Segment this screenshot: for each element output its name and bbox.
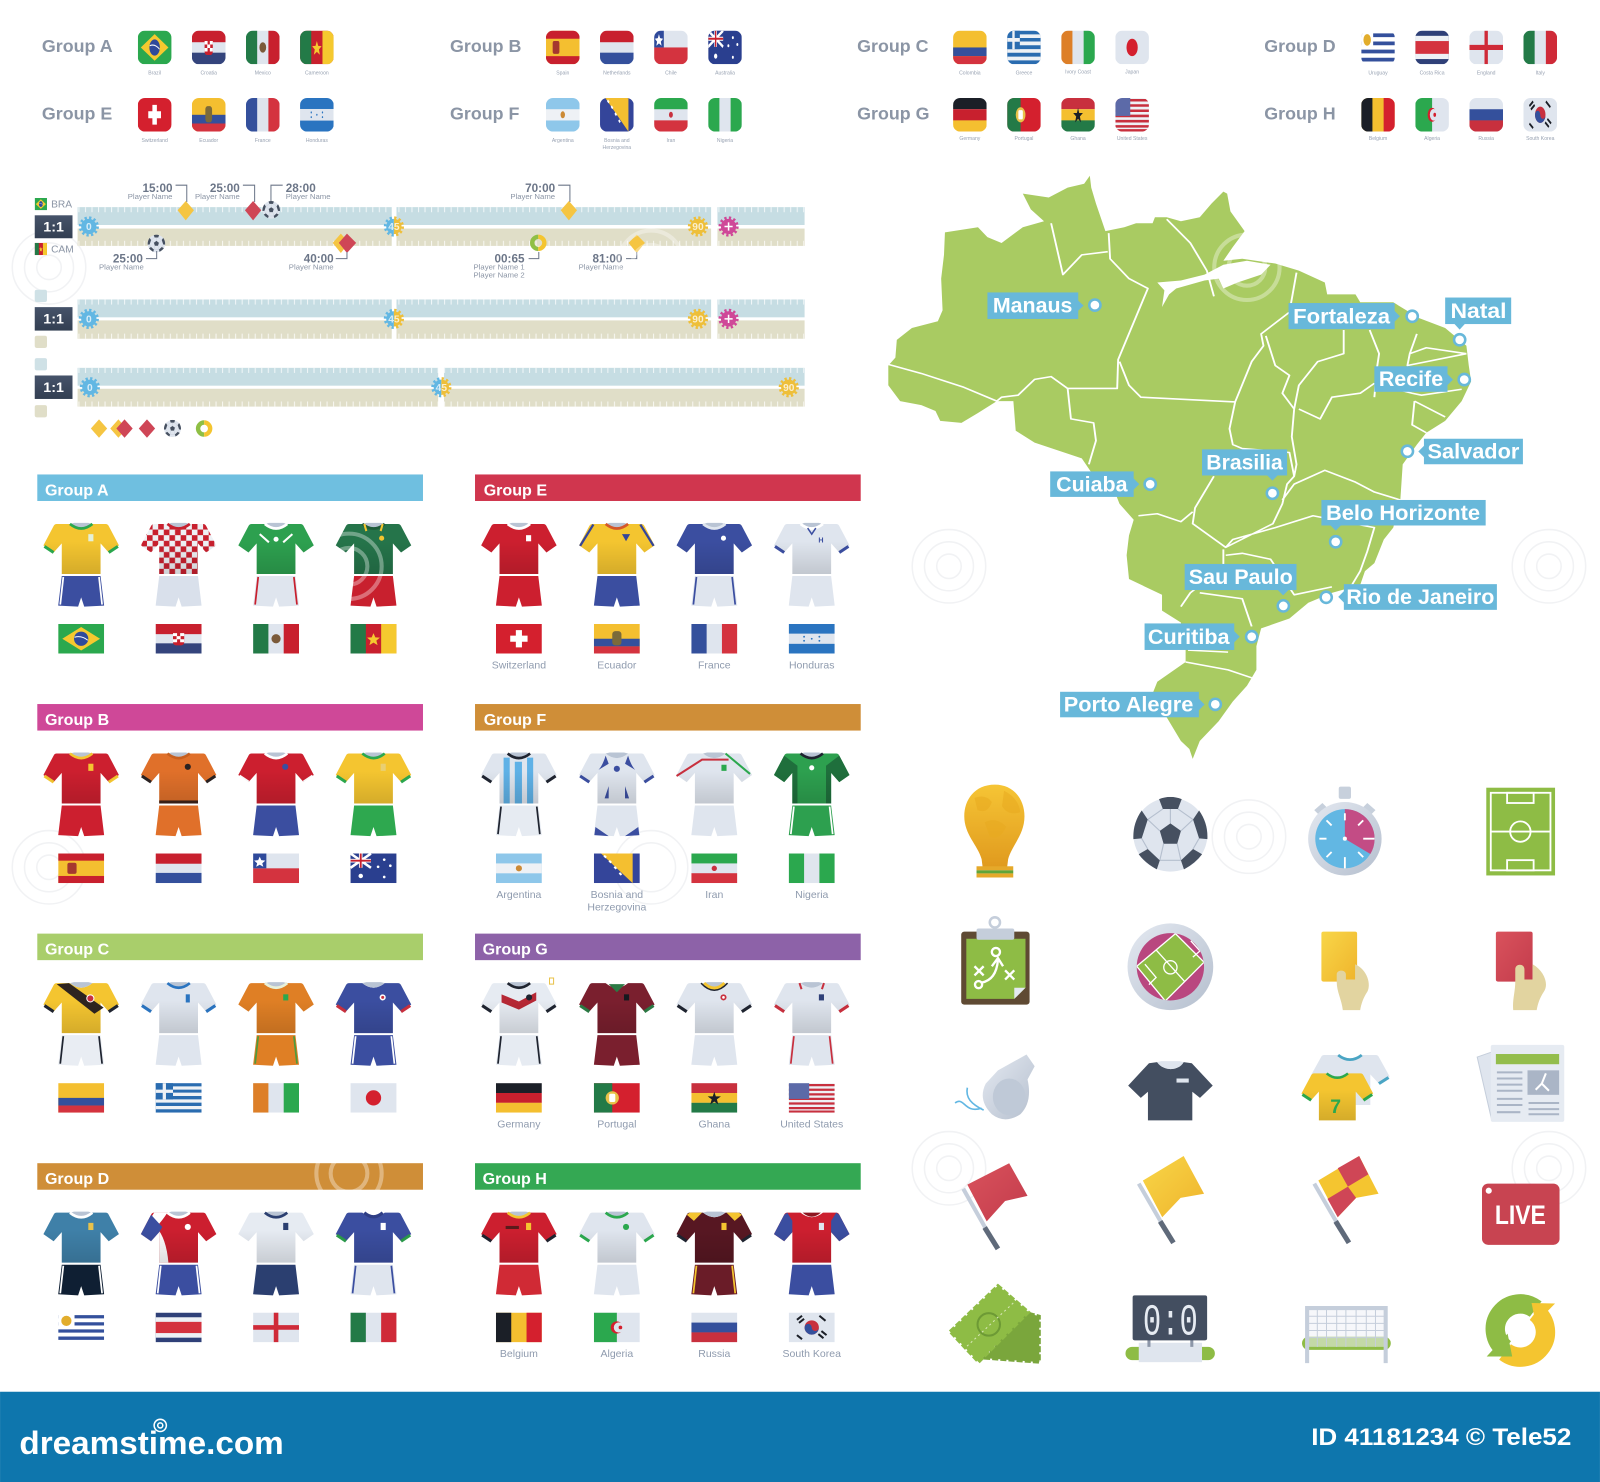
panel: group flag overview bbox=[42, 31, 1557, 151]
city: Fortaleza bbox=[1289, 303, 1418, 329]
city: Porto Alegre: Porto Alegre bbox=[1064, 693, 1193, 717]
heading: group D: Group D bbox=[45, 1170, 109, 1188]
group C flags: Colombia bbox=[959, 70, 981, 76]
icon: refresh arrows bbox=[1487, 1303, 1555, 1357]
city: Manaus bbox=[987, 292, 1100, 319]
event: 15:00 yellow card: 15:00 bbox=[143, 182, 173, 195]
kit: Croatia bbox=[141, 523, 216, 654]
panel: icon set bbox=[950, 785, 1564, 1363]
timeline row 1: CAM bbox=[51, 245, 74, 256]
timeline row 2 bbox=[35, 290, 805, 348]
event: 70:00 yellow card bbox=[510, 182, 577, 220]
group F flags bbox=[450, 98, 742, 151]
group C flags: Ivory Coast bbox=[1065, 69, 1092, 75]
icon: goal bbox=[1302, 1308, 1391, 1363]
kit: Ivory Coast bbox=[238, 982, 314, 1113]
timeline row 1: 90 bbox=[692, 222, 704, 233]
kit: Spain bbox=[43, 753, 119, 883]
group F flags: Nigeria bbox=[717, 138, 733, 144]
kit: Switzerland: Switzerland bbox=[492, 659, 546, 671]
kit: Germany bbox=[481, 978, 557, 1130]
kit: Uruguay bbox=[43, 1212, 119, 1342]
city: Belo Horizonte: Belo Horizonte bbox=[1326, 501, 1480, 525]
kit: Ghana: Ghana bbox=[699, 1118, 730, 1130]
group D flags: Uruguay bbox=[1368, 70, 1388, 76]
city: Recife: Recife bbox=[1379, 367, 1443, 391]
kit: Honduras: Honduras bbox=[789, 659, 834, 671]
icon: tactics clipboard bbox=[961, 917, 1030, 1005]
city: Sau Paulo: Sau Paulo bbox=[1189, 565, 1293, 589]
group A flags: Brazil bbox=[148, 70, 161, 76]
icon: red flag bbox=[963, 1163, 1028, 1249]
icon: football bbox=[1133, 797, 1207, 872]
group G flags: Germany bbox=[959, 136, 981, 142]
event: 40:00 second yellow: 40:00 bbox=[304, 253, 334, 266]
footer image id: ID 41181234 © Tele52 bbox=[1311, 1424, 1571, 1451]
group C flags: Greece bbox=[1016, 70, 1032, 76]
event: 81:00 yellow card: Player Name bbox=[579, 262, 623, 271]
kit: Russia: Russia bbox=[698, 1348, 730, 1360]
group E flags: Ecuador bbox=[199, 138, 218, 144]
group C flags: Group C bbox=[857, 36, 929, 56]
kit: Belgium bbox=[481, 1212, 557, 1360]
city: Natal bbox=[1445, 298, 1511, 345]
city: Salvador: Salvador bbox=[1428, 440, 1519, 464]
group D flags: Italy bbox=[1536, 70, 1545, 76]
timeline row 1: 1:1 bbox=[43, 220, 64, 236]
icon: trophy bbox=[964, 785, 1024, 877]
icon: yellow flag bbox=[1139, 1156, 1204, 1243]
kit: France: France bbox=[698, 659, 731, 671]
panel: group E kits bbox=[475, 474, 861, 671]
group B flags bbox=[450, 31, 742, 76]
group G flags: Group G bbox=[857, 103, 930, 123]
heading: group H bbox=[475, 1163, 861, 1190]
city: Sau Paulo bbox=[1185, 564, 1296, 611]
city: Brasilia bbox=[1202, 449, 1287, 499]
timeline row 3: 90 bbox=[783, 383, 795, 394]
kit: France bbox=[677, 523, 752, 671]
heading: group A: Group A bbox=[45, 481, 109, 499]
group H flags: Belgium bbox=[1369, 136, 1387, 142]
kit: Nigeria bbox=[774, 753, 849, 901]
group F flags: Argentina bbox=[552, 138, 574, 144]
footer banner bbox=[0, 1392, 1600, 1482]
heading: group E: Group E bbox=[484, 481, 547, 499]
event: 40:00 second yellow bbox=[289, 234, 356, 271]
group C flags: Japan bbox=[1125, 69, 1139, 75]
heading: group F bbox=[475, 704, 861, 731]
kit: Colombia bbox=[43, 982, 119, 1113]
group E flags: Group E bbox=[42, 103, 112, 123]
event: 25:00 goal: Player Name bbox=[99, 262, 144, 271]
group A flags bbox=[42, 31, 334, 76]
timeline row 3: 0 bbox=[87, 383, 93, 394]
event: 25:00 goal bbox=[99, 235, 165, 271]
event: 25:00 red card: 25:00 bbox=[210, 182, 240, 195]
kit: Greece bbox=[141, 982, 216, 1113]
group H flags: South Korea bbox=[1526, 136, 1555, 142]
kit: Japan bbox=[336, 982, 411, 1113]
group E flags: France bbox=[255, 138, 271, 144]
city: Fortaleza: Fortaleza bbox=[1293, 304, 1391, 328]
heading: group F: Group F bbox=[484, 711, 546, 729]
timeline row 2: 0 bbox=[86, 314, 92, 325]
group G flags: United States bbox=[1117, 136, 1148, 142]
timeline row 2: 45 bbox=[388, 314, 400, 325]
event: 28:00 goal: 28:00 bbox=[286, 182, 316, 195]
kit: Italy bbox=[336, 1213, 411, 1342]
kit: South Korea: South Korea bbox=[783, 1348, 841, 1360]
heading: group B bbox=[37, 704, 423, 731]
icon: newspaper bbox=[1477, 1045, 1564, 1122]
icon: corner flag bbox=[1314, 1156, 1379, 1243]
city: Brasilia: Brasilia bbox=[1206, 450, 1284, 474]
group D flags bbox=[1264, 31, 1557, 76]
kit: Cameroon bbox=[336, 523, 411, 654]
group D flags: England bbox=[1477, 70, 1496, 76]
group F flags: Herzegovina bbox=[603, 145, 631, 151]
kit: Portugal bbox=[579, 983, 655, 1130]
kit: Germany: Germany bbox=[497, 1118, 541, 1130]
event: 28:00 goal bbox=[262, 182, 331, 219]
icon: red card in hand bbox=[1496, 932, 1546, 1010]
map of Brazil with host cities bbox=[888, 176, 1523, 759]
event: 81:00 yellow card bbox=[579, 235, 645, 271]
kit: Australia bbox=[336, 753, 411, 883]
group E flags bbox=[42, 98, 334, 144]
timeline row 3 bbox=[35, 358, 805, 417]
group D flags: Group D bbox=[1264, 36, 1336, 56]
timeline row 1: 0 bbox=[86, 222, 92, 233]
kit: Honduras bbox=[774, 523, 849, 671]
kit: Honduras: H bbox=[818, 536, 823, 544]
group H flags bbox=[1264, 98, 1557, 142]
icon: whistle bbox=[955, 1055, 1035, 1119]
timeline row 3: 45 bbox=[436, 383, 447, 394]
group C flags bbox=[857, 31, 1149, 76]
timeline row 2: 90 bbox=[692, 314, 704, 325]
group F flags: Group F bbox=[450, 103, 520, 123]
city: Curitiba: Curitiba bbox=[1148, 625, 1231, 649]
kit: United States bbox=[774, 982, 849, 1130]
group F flags: Bosnia and bbox=[604, 138, 630, 144]
group A flags: Cameroon bbox=[305, 70, 329, 76]
icon: two jerseys bbox=[1301, 1055, 1390, 1120]
event: 25:00 red card bbox=[195, 182, 261, 220]
group E flags: Switzerland bbox=[141, 138, 168, 144]
group B flags: Spain bbox=[556, 70, 569, 76]
kit: Nigeria: Nigeria bbox=[795, 889, 829, 901]
icon: stadium bbox=[1128, 923, 1213, 1010]
kit: Bosnia and Herzegovina bbox=[579, 753, 655, 914]
city: Cuiaba: Cuiaba bbox=[1056, 472, 1129, 496]
kit: Ghana bbox=[677, 982, 752, 1130]
kit: Ecuador: Ecuador bbox=[597, 659, 637, 671]
group G flags bbox=[857, 98, 1149, 142]
icon: tickets bbox=[950, 1286, 1039, 1362]
event: 81:00 yellow card: 81:00 bbox=[592, 253, 623, 266]
event: 70:00 yellow card: Player Name bbox=[510, 192, 555, 201]
panel: group F kits bbox=[475, 704, 861, 914]
city: Curitiba bbox=[1145, 623, 1257, 650]
event: 00:65 substitution: Player Name 1 bbox=[473, 262, 525, 271]
heading: group C bbox=[37, 934, 423, 960]
kit: Switzerland bbox=[481, 523, 557, 671]
icon: scoreboard bbox=[1125, 1295, 1215, 1362]
city: Natal: Natal bbox=[1450, 299, 1507, 323]
event: 15:00 yellow card: Player Name bbox=[128, 192, 172, 201]
kit: Russia bbox=[677, 1212, 752, 1360]
group D flags: Costa Rica bbox=[1420, 70, 1445, 76]
group G flags: Ghana bbox=[1070, 136, 1086, 142]
city: Belo Horizonte bbox=[1321, 500, 1486, 547]
group G flags: Portugal bbox=[1014, 136, 1033, 142]
group B flags: Chile bbox=[665, 70, 677, 76]
kit: England bbox=[238, 1212, 314, 1342]
group B flags: Group B bbox=[450, 36, 522, 56]
city: Recife bbox=[1374, 366, 1470, 392]
icon: two jerseys: 7 bbox=[1330, 1096, 1341, 1118]
city: Manaus: Manaus bbox=[993, 294, 1073, 318]
kit: Chile bbox=[238, 753, 314, 883]
heading: group G: Group G bbox=[483, 941, 548, 959]
kit: United States: United States bbox=[780, 1118, 843, 1130]
kit: Argentina bbox=[481, 753, 557, 901]
group A flags: Croatia bbox=[200, 70, 217, 76]
city: Cuiaba bbox=[1050, 471, 1156, 497]
event: 15:00 yellow card bbox=[128, 182, 194, 220]
kit: Algeria: Algeria bbox=[601, 1348, 633, 1360]
heading: group D bbox=[37, 1163, 423, 1190]
footer logo text: dreamstime.com bbox=[19, 1424, 284, 1461]
kit: Costa Rica bbox=[141, 1212, 216, 1342]
icon: live badge bbox=[1482, 1184, 1560, 1245]
group H flags: Algeria bbox=[1424, 136, 1440, 142]
timeline row 3: 1:1 bbox=[43, 380, 64, 396]
panel: group H kits bbox=[475, 1163, 861, 1360]
icon: yellow card in hand bbox=[1321, 932, 1369, 1010]
timeline row 1: 45 bbox=[388, 222, 400, 233]
kit: Brazil bbox=[43, 523, 119, 654]
timeline row 1 bbox=[35, 198, 805, 256]
event: 00:65 substitution: 00:65 bbox=[495, 253, 525, 266]
timeline row 1: BRA bbox=[51, 200, 72, 211]
heading: group H: Group H bbox=[483, 1170, 547, 1188]
group B flags: Australia bbox=[715, 70, 735, 76]
event: 25:00 goal: 25:00 bbox=[113, 253, 143, 266]
kit: Argentina: Argentina bbox=[496, 889, 542, 901]
group E flags: Honduras bbox=[306, 138, 328, 144]
icon: live badge: LIVE bbox=[1495, 1200, 1546, 1230]
panel: group B kits bbox=[37, 704, 423, 883]
kit: Bosnia and Herzegovina: Herzegovina bbox=[587, 902, 646, 914]
heading: group A bbox=[37, 474, 423, 501]
group B flags: Netherlands bbox=[603, 70, 631, 76]
event: 70:00 yellow card: 70:00 bbox=[525, 182, 556, 195]
kit: Iran bbox=[677, 753, 752, 901]
kit: Mexico bbox=[238, 523, 314, 654]
kit: Bosnia and Herzegovina: Bosnia and bbox=[591, 889, 643, 901]
heading: group G bbox=[475, 934, 861, 960]
kit: South Korea bbox=[774, 1213, 849, 1360]
kit: Iran: Iran bbox=[705, 889, 723, 901]
kit: Algeria bbox=[579, 1212, 655, 1360]
event: 40:00 second yellow: Player Name bbox=[289, 262, 334, 271]
timeline legend bbox=[91, 419, 210, 438]
heading: group C: Group C bbox=[45, 941, 110, 959]
event: 25:00 red card: Player Name bbox=[195, 192, 240, 201]
heading: group E bbox=[475, 474, 861, 501]
heading: group B: Group B bbox=[45, 711, 109, 729]
group H flags: Russia bbox=[1478, 136, 1494, 142]
panel: group D kits bbox=[37, 1163, 423, 1342]
group A flags: Mexico bbox=[255, 70, 271, 76]
event: 28:00 goal: Player Name bbox=[286, 192, 331, 201]
icon: scoreboard: 0:0 bbox=[1143, 1299, 1198, 1349]
kit: Ecuador bbox=[579, 523, 655, 671]
group F flags: Iran bbox=[667, 138, 675, 144]
kit: Netherlands bbox=[141, 753, 216, 883]
panel: group C kits bbox=[37, 934, 423, 1113]
group H flags: Group H bbox=[1264, 103, 1336, 123]
event: 00:65 substitution bbox=[473, 237, 544, 280]
event: 00:65 substitution: Player Name 2 bbox=[473, 271, 525, 280]
icon: stopwatch bbox=[1308, 787, 1382, 875]
panel: match timelines bbox=[35, 182, 805, 438]
icon: football pitch bbox=[1486, 788, 1555, 875]
kit: Belgium: Belgium bbox=[500, 1348, 538, 1360]
panel: group A kits bbox=[37, 474, 423, 654]
panel: group G kits bbox=[475, 934, 861, 1130]
icon: referee shirt bbox=[1128, 1061, 1213, 1120]
kit: Portugal: Portugal bbox=[597, 1118, 636, 1130]
timeline row 2: 1:1 bbox=[43, 311, 64, 327]
city: Rio de Janeiro: Rio de Janeiro bbox=[1346, 585, 1494, 609]
map: country shape bbox=[888, 176, 1471, 759]
group A flags: Group A bbox=[42, 36, 113, 56]
